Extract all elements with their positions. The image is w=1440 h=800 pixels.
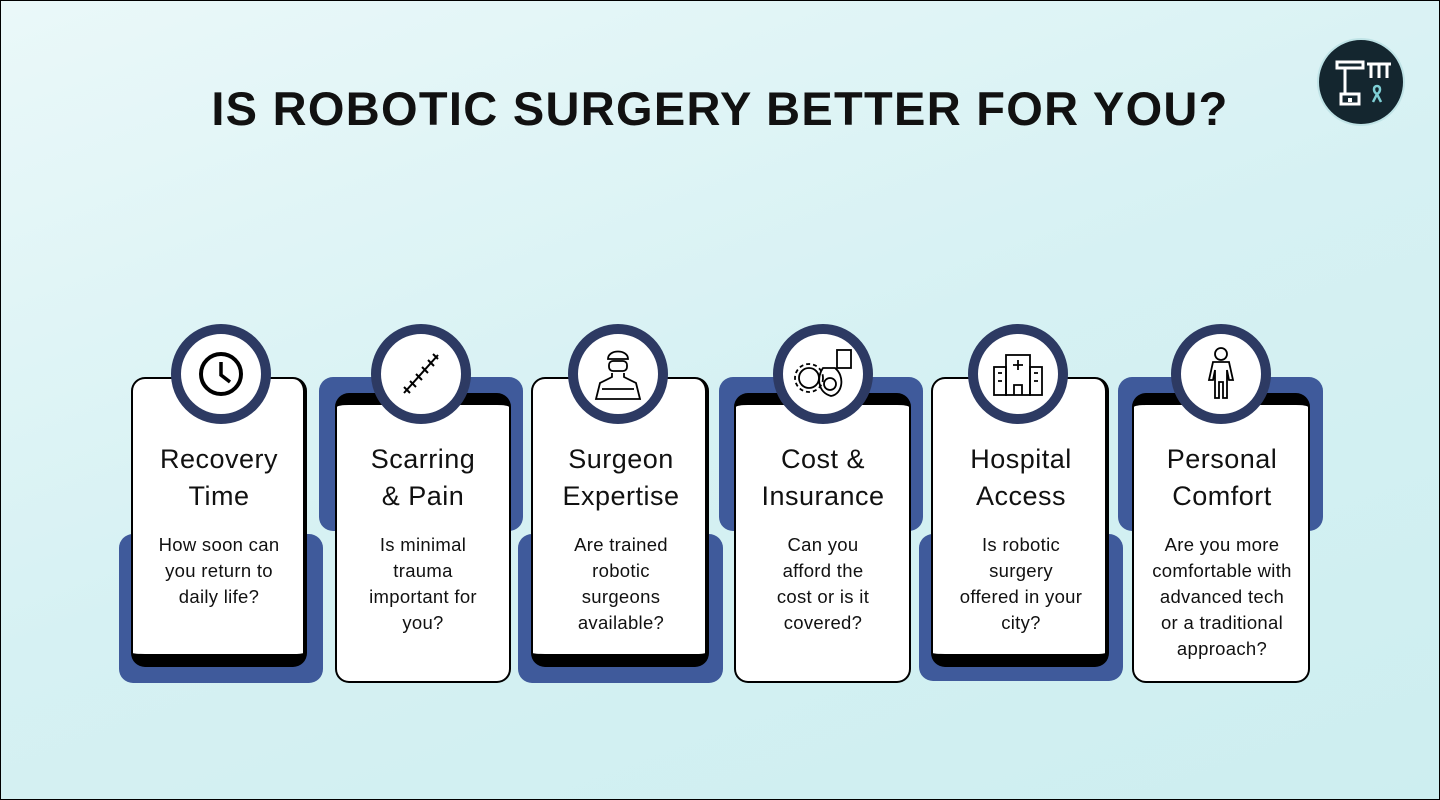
- card 3: Surgeon Expertise: Surgeon: [568, 444, 674, 474]
- card 1: Recovery Time: Recovery: [160, 444, 278, 474]
- card 6: Personal Comfort: or a traditional: [1161, 612, 1283, 633]
- card 2: Scarring & Pain: important for: [369, 586, 477, 607]
- card 6: Personal Comfort: advanced tech: [1160, 586, 1284, 607]
- card 4: Cost & Insurance: Can you: [787, 534, 858, 555]
- card 4: Cost & Insurance: Cost &: [781, 444, 865, 474]
- card 1: Recovery Time: [119, 324, 323, 683]
- card 4: Cost & Insurance: cost or is it: [777, 586, 869, 607]
- card 5: Hospital Access: [919, 324, 1123, 681]
- logo: [1317, 38, 1405, 126]
- card 2: Scarring & Pain: [319, 324, 523, 683]
- card 5: Hospital Access: Is robotic: [982, 534, 1060, 555]
- card 2: Scarring & Pain: trauma: [393, 560, 453, 581]
- card 3: Surgeon Expertise: Expertise: [562, 481, 680, 511]
- card 6: Personal Comfort: Are you more: [1165, 534, 1279, 555]
- card 3: Surgeon Expertise: Are trained: [574, 534, 668, 555]
- card 5: Hospital Access: city?: [1001, 612, 1041, 633]
- card 3: Surgeon Expertise: available?: [578, 612, 664, 633]
- card 1: Recovery Time: daily life?: [179, 586, 259, 607]
- card 3: Surgeon Expertise: surgeons: [582, 586, 660, 607]
- card 4: Cost & Insurance: covered?: [784, 612, 862, 633]
- card 2: Scarring & Pain: & Pain: [382, 481, 464, 511]
- card 5: Hospital Access: Hospital: [970, 444, 1072, 474]
- card 2: Scarring & Pain: Scarring: [371, 444, 475, 474]
- card 2: Scarring & Pain: Is minimal: [380, 534, 466, 555]
- card 5: Hospital Access: surgery: [989, 560, 1053, 581]
- card 4: Cost & Insurance: [719, 324, 923, 683]
- card 6: Personal Comfort: Personal: [1167, 444, 1277, 474]
- title: IS ROBOTIC SURGERY BETTER FOR YOU?: [211, 82, 1229, 135]
- card 1: Recovery Time: How soon can: [159, 534, 279, 555]
- card 4: Cost & Insurance: afford the: [783, 560, 863, 581]
- card 1: Recovery Time: Time: [188, 481, 250, 511]
- card 6: Personal Comfort: [1118, 324, 1323, 683]
- card 4: Cost & Insurance: Insurance: [761, 481, 885, 511]
- card 6: Personal Comfort: comfortable with: [1152, 560, 1292, 581]
- card 6: Personal Comfort: approach?: [1177, 638, 1267, 659]
- card 2: Scarring & Pain: you?: [402, 612, 444, 633]
- card 1: Recovery Time: you return to: [165, 560, 273, 581]
- card 5: Hospital Access: Access: [976, 481, 1066, 511]
- card 6: Personal Comfort: Comfort: [1172, 481, 1272, 511]
- card 3: Surgeon Expertise: [518, 324, 723, 683]
- card 3: Surgeon Expertise: robotic: [592, 560, 650, 581]
- card 5: Hospital Access: offered in your: [960, 586, 1082, 607]
